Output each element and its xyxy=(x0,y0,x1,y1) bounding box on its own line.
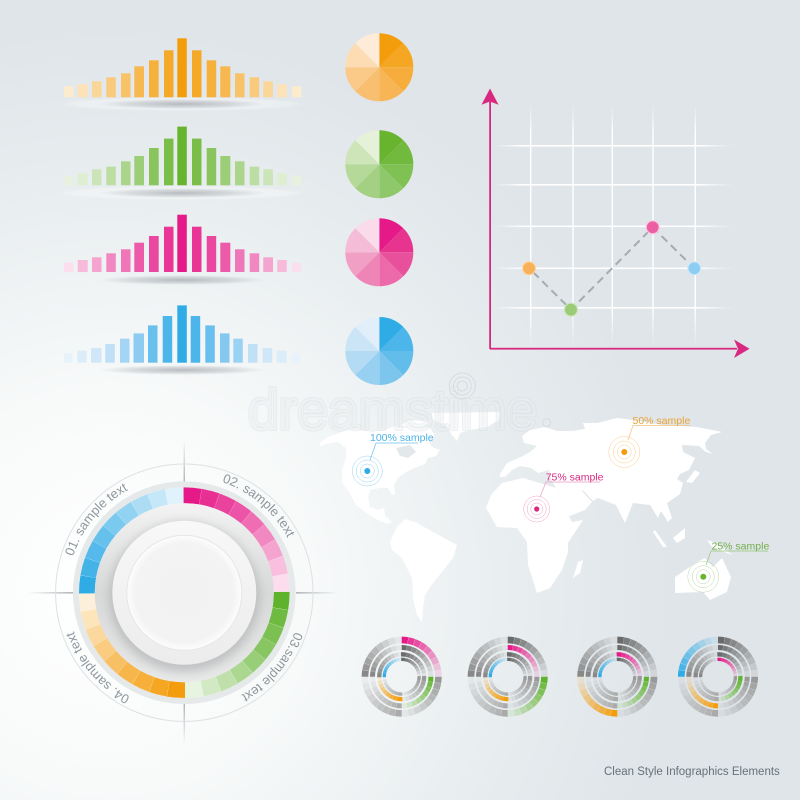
pie: pink xyxy=(345,218,413,286)
sample text labels: 04. sample text xyxy=(66,631,129,704)
mini radial chart 1 xyxy=(350,625,453,728)
sample text labels: 03.sample text xyxy=(241,633,302,702)
light ring xyxy=(73,481,296,704)
data point: orange xyxy=(522,262,536,275)
data point: green xyxy=(564,303,578,316)
plate face xyxy=(127,535,242,650)
islands xyxy=(573,470,733,578)
color segment ring xyxy=(47,455,322,730)
eurasia xyxy=(500,418,722,523)
x axis arrow xyxy=(490,340,750,358)
sample text labels: 01. sample text xyxy=(66,484,128,555)
dish xyxy=(95,503,274,682)
y axis arrow xyxy=(482,88,498,349)
bar chart: blue xyxy=(64,305,300,375)
map pin: 25% sample xyxy=(688,540,769,592)
map pin: 25% sample: 25% sample xyxy=(712,540,769,552)
data point: pink xyxy=(646,221,659,234)
africa xyxy=(486,478,583,593)
watermark: dreamstime xyxy=(248,378,537,441)
south america xyxy=(390,519,457,622)
sample text labels: 02. sample text xyxy=(224,474,294,538)
mini radial chart 3 xyxy=(566,625,669,728)
mini radial chart 2 xyxy=(456,625,559,728)
data point: blue xyxy=(688,262,701,275)
bar chart: green xyxy=(57,127,307,200)
map pin: 50% sample xyxy=(609,415,690,468)
map pin: 75% sample: 75% sample xyxy=(546,472,604,484)
map pin: 100% sample: 100% sample xyxy=(370,432,434,444)
line chart xyxy=(482,88,750,358)
pie: orange xyxy=(345,33,413,101)
world map xyxy=(320,412,733,622)
pie: green xyxy=(345,130,413,198)
map pin: 50% sample: 50% sample xyxy=(632,415,690,427)
outer thin ring xyxy=(56,464,313,721)
watermark: dreamstime xyxy=(248,378,537,441)
mini radial chart 4 xyxy=(666,625,770,728)
bar chart: pink xyxy=(64,215,301,285)
australia xyxy=(675,558,731,600)
arctic islands and greenland xyxy=(400,412,500,441)
map pin: 75% sample xyxy=(524,472,604,522)
plate xyxy=(112,521,256,665)
main radial dial xyxy=(32,444,334,740)
compass cross lines xyxy=(28,440,338,745)
plate shadow xyxy=(109,522,259,672)
bar chart: orange xyxy=(57,38,307,111)
map pin: 100% sample xyxy=(352,432,434,486)
hudson bay xyxy=(396,445,416,458)
north america xyxy=(320,426,440,524)
pie: blue xyxy=(345,317,413,385)
footer caption: Clean Style Infographics Elements xyxy=(604,766,780,778)
sample text labels xyxy=(66,474,302,704)
